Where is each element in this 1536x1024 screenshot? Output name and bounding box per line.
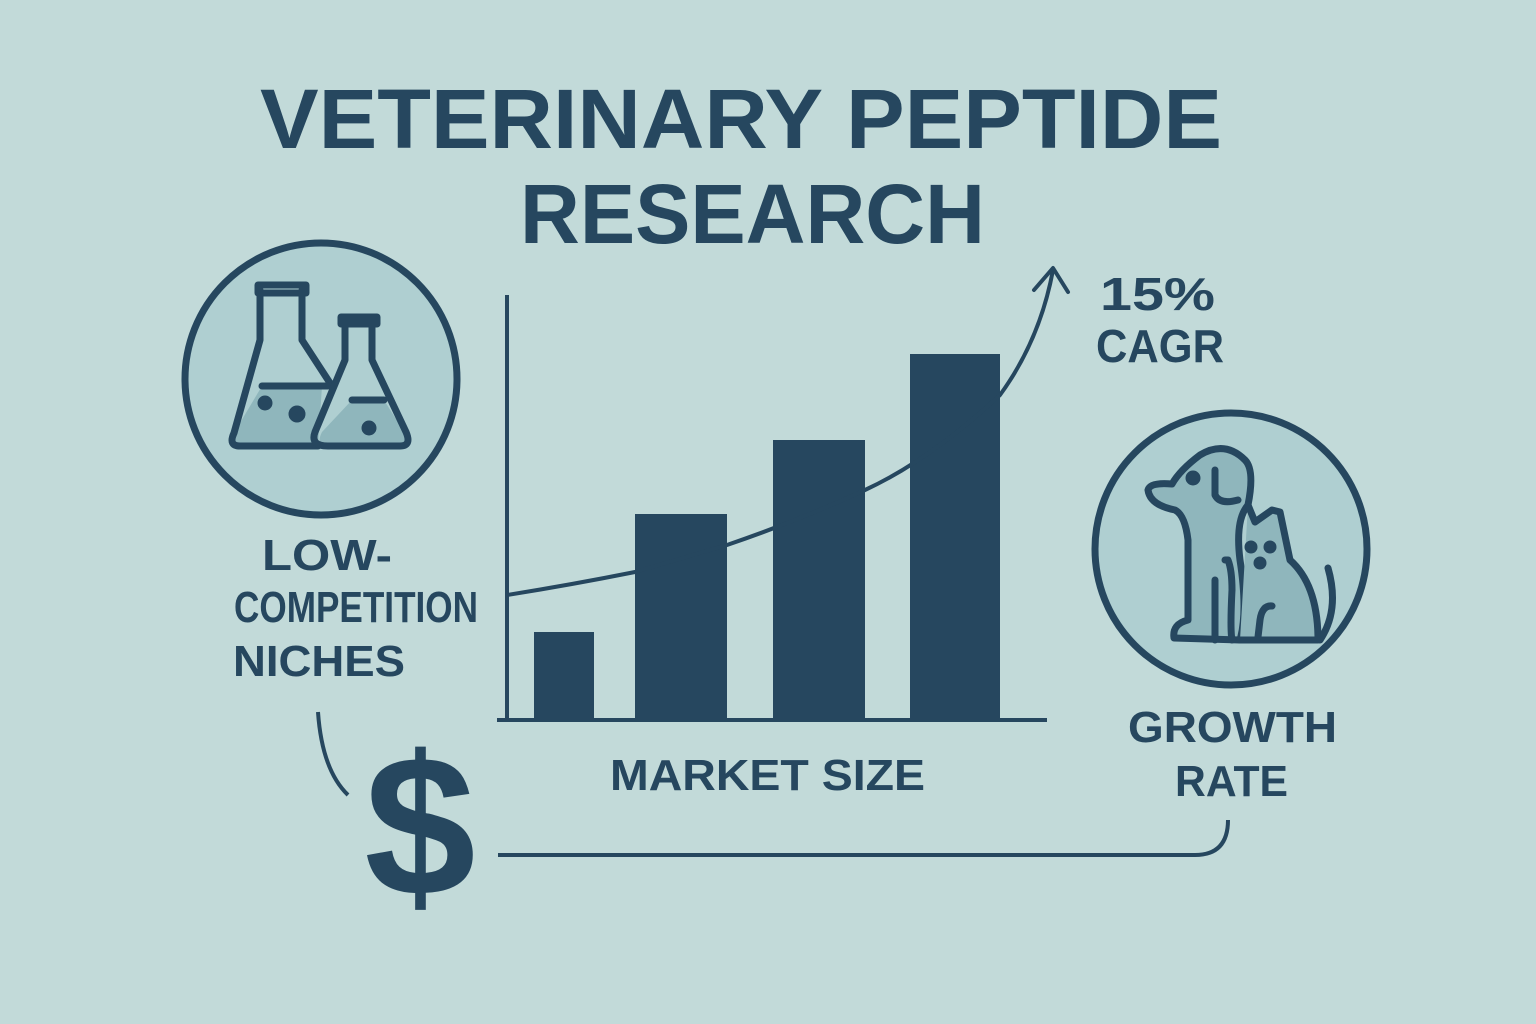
title: [260, 72, 1222, 261]
title: RESEARCH: [520, 167, 985, 261]
label: low-competition niches: NICHES: [233, 637, 405, 686]
icon: dog and cat: [1095, 413, 1367, 685]
label: low-competition niches: [233, 531, 478, 686]
label: 15% CAGR: 15%: [1100, 268, 1215, 320]
icon: dollar sign: $: [364, 715, 476, 938]
label: growth rate: [1128, 703, 1337, 806]
title: VETERINARY PEPTIDE: [260, 72, 1222, 166]
label: growth rate: GROWTH: [1128, 703, 1337, 752]
connector curve left: [318, 712, 348, 795]
bar chart: [497, 268, 1068, 722]
connector line bottom: [498, 820, 1228, 855]
icon: flasks: [185, 243, 457, 515]
label: low-competition niches: LOW-: [262, 531, 392, 580]
label: market size: MARKET SIZE: [610, 751, 925, 800]
trend line arrow: [507, 268, 1068, 595]
label: low-competition niches: COMPETITION: [234, 583, 478, 632]
label: 15% CAGR: CAGR: [1096, 320, 1224, 372]
label: 15% CAGR: [1096, 268, 1224, 372]
label: growth rate: RATE: [1175, 757, 1288, 806]
